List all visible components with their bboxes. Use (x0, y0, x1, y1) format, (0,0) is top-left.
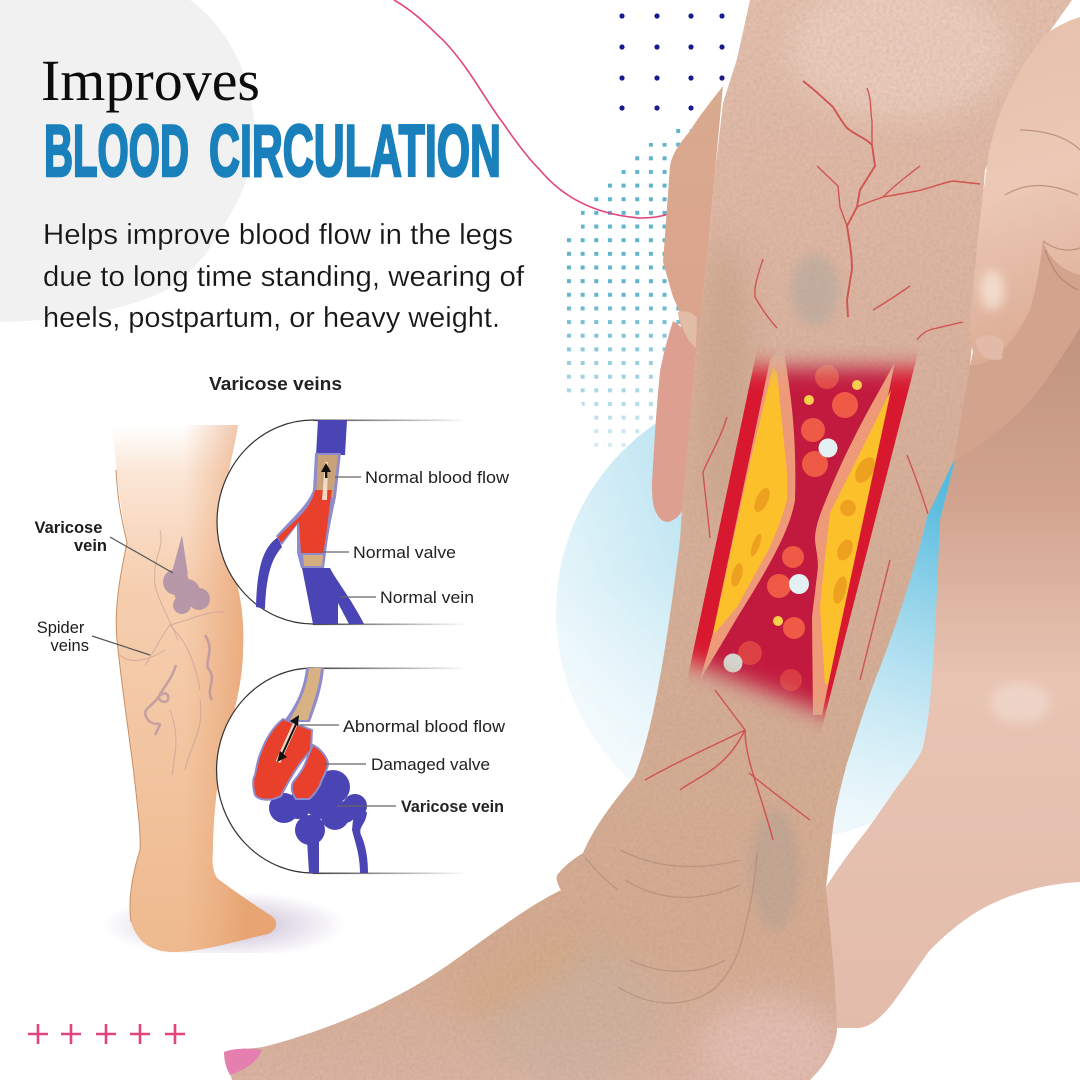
illustration: leg with varicose veins (92, 425, 347, 959)
description text: Helps improve blood flow in the legs (43, 219, 513, 251)
labels (343, 717, 506, 816)
white cells (724, 438, 838, 672)
leader: spider (92, 636, 150, 655)
bruise patch (791, 254, 839, 326)
callout disc (217, 668, 313, 873)
finger shading (953, 241, 1080, 462)
labels: Damaged valve (371, 755, 490, 774)
leader: varicose (110, 537, 173, 573)
leg shape (113, 425, 276, 952)
photo: right hand (953, 17, 1080, 462)
lumen (706, 366, 896, 711)
photo: back leg (826, 320, 1080, 1028)
label: spider veins: veins (50, 637, 89, 655)
left plaque (700, 345, 795, 680)
labels: Normal blood flow (365, 468, 510, 487)
outer vessel wall (685, 345, 920, 735)
leaders (322, 477, 376, 597)
diagram heading: Varicose veins (209, 373, 342, 394)
red veins (645, 81, 980, 840)
labels: Normal vein (380, 588, 474, 607)
label: varicose vein: vein (74, 537, 107, 555)
title line: blood circulation: BLOOD (44, 111, 189, 192)
leaders (300, 725, 396, 806)
title line: blood circulation: CIRCULATION (209, 111, 501, 192)
varicose blob (163, 535, 210, 614)
blood cells (738, 365, 858, 691)
knuckle highlight (980, 270, 1004, 310)
label: spider veins: Spider (37, 619, 85, 637)
nail (975, 335, 1004, 360)
callout disc (217, 420, 313, 624)
title (41, 48, 501, 192)
plaque flecks (729, 454, 879, 605)
curve: pink (394, 0, 668, 218)
ankle creases (585, 850, 757, 1003)
dot grid: navy (619, 13, 725, 111)
decorative circle: blue (556, 384, 1012, 840)
right plaque (812, 362, 895, 715)
floor shadow (117, 895, 334, 953)
leg outline (116, 470, 140, 922)
tonal shading (447, 0, 1010, 1080)
varicose cluster (269, 770, 368, 873)
photo: left hand fingers (652, 86, 723, 522)
vein drawing (256, 420, 364, 624)
decoration: plus signs (28, 1024, 185, 1044)
callout: damaged vein (217, 668, 506, 874)
description text: heels, postpartum, or heavy weight. (43, 302, 500, 334)
pale patch (990, 683, 1050, 723)
description text: due to long time standing, wearing of (43, 261, 525, 293)
labels (353, 468, 510, 607)
labels: Normal valve (353, 543, 456, 562)
artery cross-section overlay (685, 345, 920, 735)
damaged valve drawing (253, 668, 328, 800)
callout: normal vein (217, 420, 510, 625)
labels: Varicose vein (401, 797, 504, 816)
platelets (773, 380, 862, 626)
toenail (224, 1049, 262, 1075)
spider veins (145, 635, 212, 735)
background blob: grey (0, 0, 254, 322)
labels: Abnormal blood flow (343, 717, 506, 736)
title line: Improves: Improves (41, 48, 260, 113)
label: varicose vein: Varicose (35, 519, 102, 537)
dot grid: cyan (560, 129, 700, 460)
photo: front leg (224, 0, 1072, 1080)
skin texture (224, 0, 1072, 1080)
